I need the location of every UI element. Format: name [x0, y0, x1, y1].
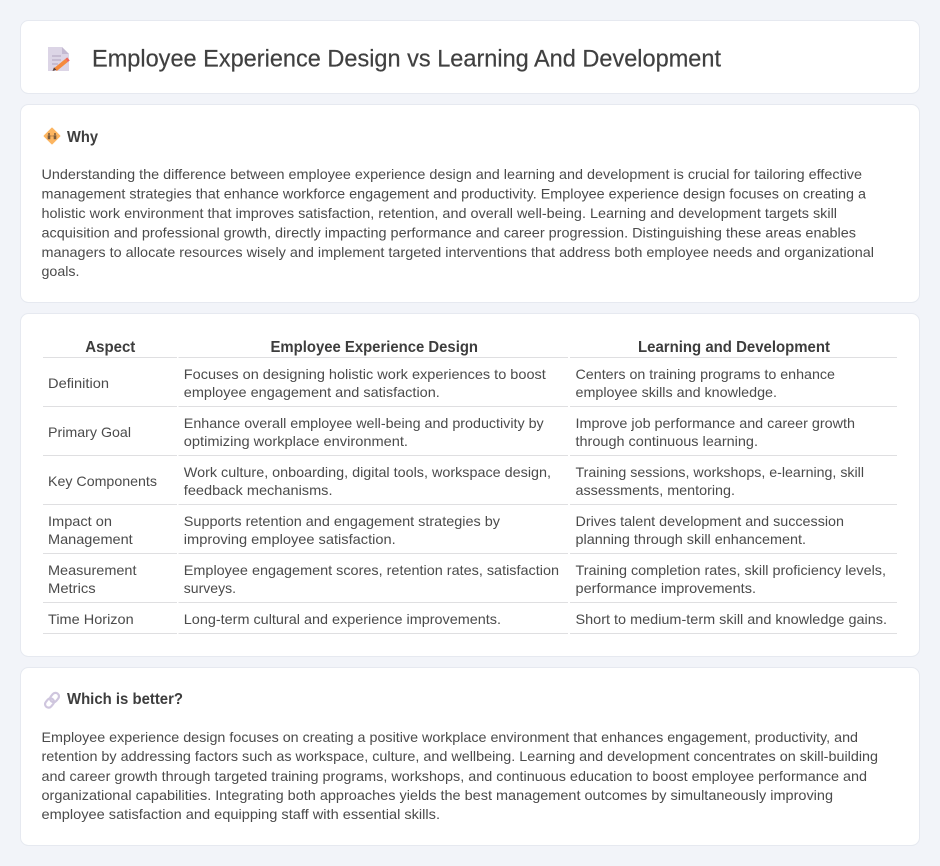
- row: measurement metrics: [48, 562, 886, 596]
- row: measurement metrics: Measurement: [48, 562, 137, 578]
- row: primary goal: Improve job performance and career growth: [576, 415, 855, 431]
- row: time horizon: [48, 611, 887, 627]
- heading: why: Why: [67, 129, 98, 146]
- row: measurement metrics: performance improvements.: [576, 580, 756, 596]
- text block: why paragraph: managers to allocate resources wisely and implement targeted interventions that address both employee needs and organizational: [42, 244, 874, 260]
- text block: which is better paragraph: retention by addressing factors such as workspace, culture, and wellbeing. Learning and development concentrates on skill-building: [42, 748, 878, 764]
- row: key components: Work culture, onboarding, digital tools, workspace design,: [184, 464, 551, 480]
- row: definition: Focuses on designing holistic work experiences to boost: [184, 366, 546, 382]
- table header row: [85, 339, 831, 356]
- row: primary goal: optimizing workplace environment.: [184, 433, 408, 449]
- text block: why paragraph: Understanding the difference between employee experience design and learning and development is crucial for tailoring effective: [42, 166, 862, 182]
- text block: why paragraph: acquisition and professional growth, directly impacting performance and career progression. Distinguishing these areas enables: [42, 224, 856, 240]
- row: impact on management: planning through skill enhancement.: [576, 531, 806, 547]
- panel: why: [20, 104, 920, 302]
- row: impact on management: Drives talent development and succession: [576, 513, 844, 529]
- row: time horizon: Time Horizon: [48, 611, 134, 627]
- text block: why paragraph: goals.: [42, 263, 80, 279]
- table header row: Aspect: [85, 339, 136, 356]
- heading: which is better: Which is better?: [67, 691, 183, 708]
- icon: document with pencil: [48, 47, 69, 71]
- row: impact on management: [48, 513, 844, 547]
- text block: why paragraph: [42, 166, 874, 279]
- row: definition: [48, 366, 835, 400]
- row: measurement metrics: surveys.: [184, 580, 236, 596]
- row: definition: Definition: [48, 375, 109, 391]
- panel: title header: [20, 20, 920, 94]
- text block: which is better paragraph: employee satisfaction and equipping staff with essential skills.: [42, 806, 440, 822]
- row: primary goal: Primary Goal: [48, 424, 131, 440]
- text block: which is better paragraph: organizational capabilities. Integrating both approaches yields the best management outcomes by simultaneously improving: [42, 787, 833, 803]
- table header row: Employee Experience Design: [270, 339, 478, 356]
- row: time horizon: Long-term cultural and experience improvements.: [184, 611, 501, 627]
- row: definition: Centers on training programs to enhance: [576, 366, 835, 382]
- row: definition: employee skills and knowledge.: [576, 384, 777, 400]
- row: measurement metrics: Training completion rates, skill proficiency levels,: [576, 562, 886, 578]
- row: key components: Key Components: [48, 473, 157, 489]
- row: definition: employee engagement and satisfaction.: [184, 384, 440, 400]
- text block: which is better paragraph: [42, 729, 878, 822]
- row: primary goal: Enhance overall employee well-being and productivity by: [184, 415, 544, 431]
- title: Employee Experience Design vs Learning And Development: [92, 46, 721, 72]
- panel: which is better: [20, 668, 920, 846]
- row: measurement metrics: Metrics: [48, 580, 96, 596]
- icon: chain link: [44, 691, 60, 709]
- row: key components: assessments, mentoring.: [576, 482, 735, 498]
- row: key components: Training sessions, workshops, e-learning, skill: [576, 464, 864, 480]
- row: time horizon: Short to medium-term skill and knowledge gains.: [576, 611, 887, 627]
- text block: which is better paragraph: Employee experience design focuses on creating a positive workplace environment that enhances engagement, productivity, and: [42, 729, 858, 745]
- text block: which is better paragraph: and career growth through targeted training programs, workshops, and continuous education to boost employee performance and: [42, 768, 867, 784]
- row: impact on management: Management: [48, 531, 133, 547]
- row: primary goal: [48, 415, 855, 449]
- row: key components: [48, 464, 864, 498]
- table header row: Learning and Development: [638, 339, 831, 356]
- text block: why paragraph: management strategies that enhance workforce engagement and productivity. Employee experience design focuses on creating a: [42, 186, 866, 202]
- text block: why paragraph: holistic work environment that improves satisfaction, retention, and overall well-being. Learning and development targets skill: [42, 205, 837, 221]
- row: impact on management: improving employee satisfaction.: [184, 531, 396, 547]
- row: impact on management: Impact on: [48, 513, 112, 529]
- row: primary goal: through continuous learning.: [576, 433, 758, 449]
- panel: comparison table: [20, 314, 920, 656]
- icon: diamond warning sign: [44, 128, 60, 144]
- row: key components: feedback mechanisms.: [184, 482, 332, 498]
- row: measurement metrics: Employee engagement scores, retention rates, satisfaction: [184, 562, 559, 578]
- row: impact on management: Supports retention and engagement strategies by: [184, 513, 500, 529]
